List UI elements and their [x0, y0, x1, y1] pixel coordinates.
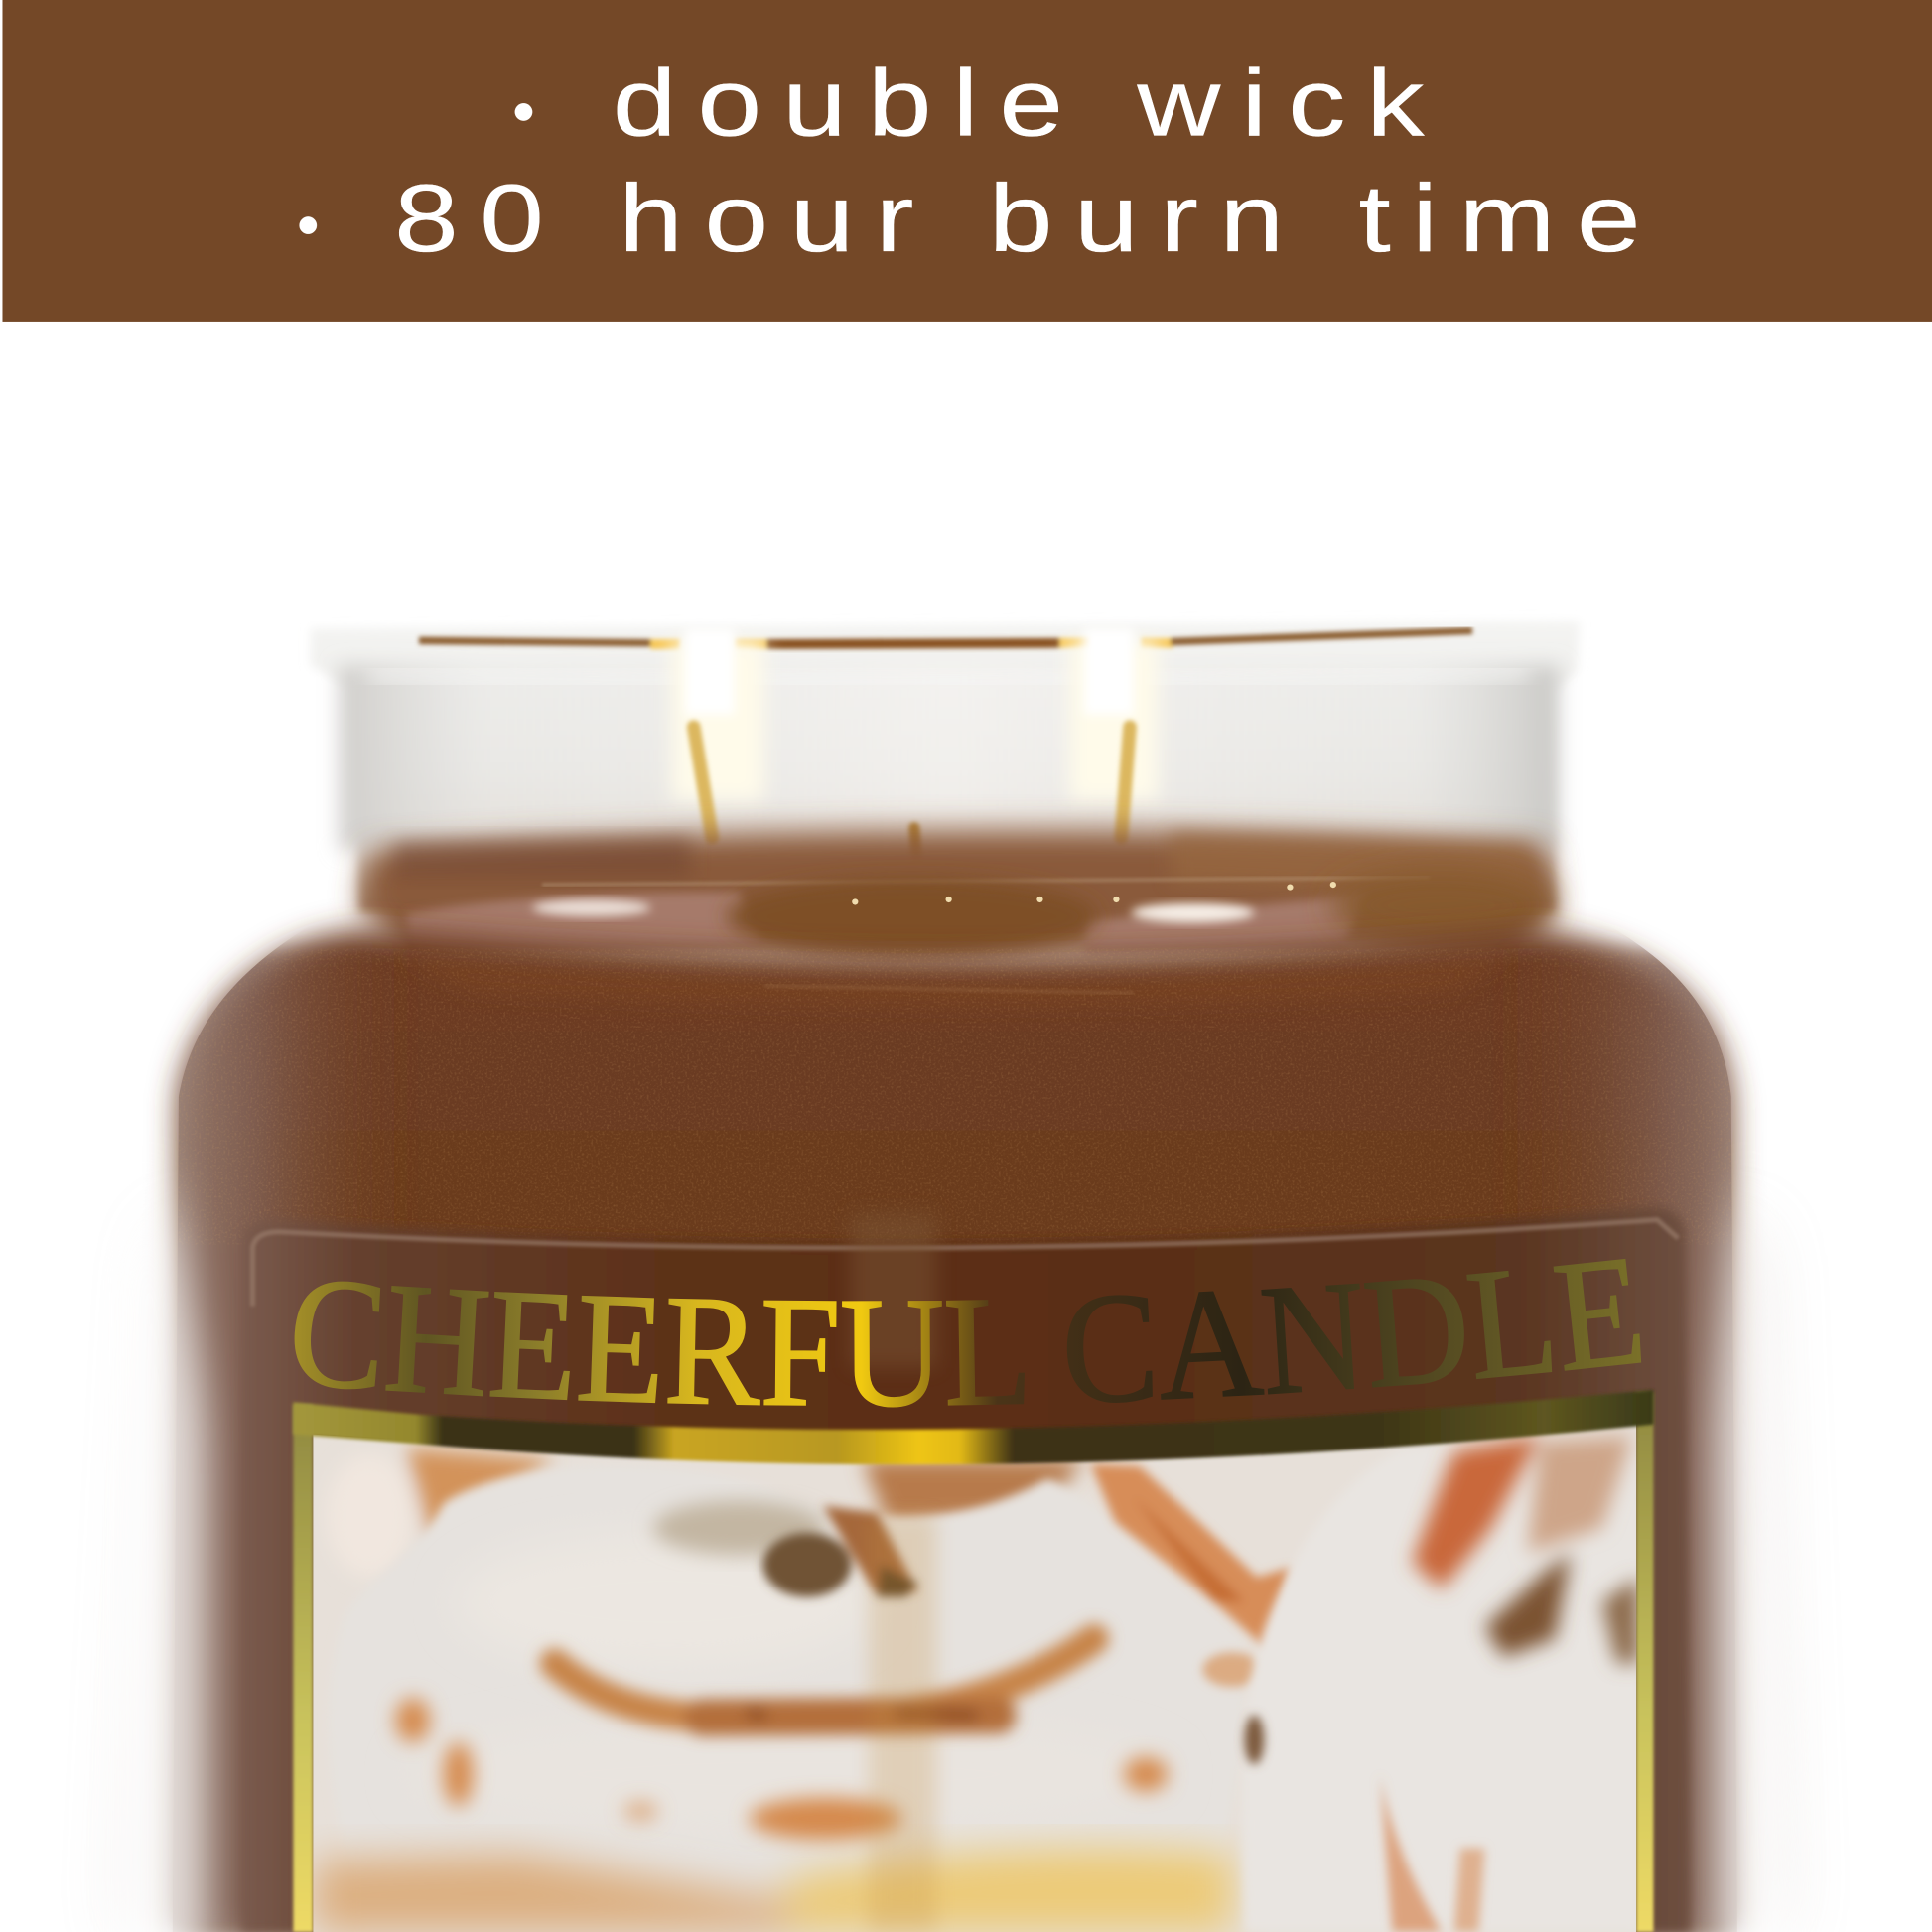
orange swirl band — [554, 1639, 1094, 1719]
wicks — [694, 727, 1130, 878]
candle jar photo — [148, 622, 1771, 1932]
flames — [671, 628, 1159, 801]
candle wax surface — [359, 830, 1555, 956]
lower golden pastry — [314, 1849, 1232, 1932]
right roll — [1242, 1436, 1639, 1932]
header banner — [2, 0, 1932, 322]
feature line: 80 hour burn time: 80 hour burn time — [394, 164, 1641, 272]
feature line: double wick: double wick — [613, 49, 1425, 156]
swirl centre — [653, 1501, 826, 1555]
glass jar neck — [311, 621, 1580, 911]
cinnamon roll picture — [313, 1417, 1639, 1932]
gold frame left — [293, 1405, 313, 1932]
soft jar halo — [129, 1232, 1780, 1932]
gold frame right — [1636, 1392, 1654, 1932]
orange pastry behind — [327, 1448, 1084, 1578]
right orange wedge — [1090, 1463, 1292, 1687]
label outline — [252, 1220, 1678, 1307]
brand name: CHEERFUL CANDLE — [294, 1259, 1642, 1408]
jar seam reflection — [869, 1516, 936, 1932]
main roll — [421, 1465, 1076, 1555]
glass rim line — [419, 630, 1472, 649]
gold band — [293, 1390, 1654, 1464]
front label — [240, 1205, 1696, 1932]
jar body — [111, 930, 1799, 1932]
lower edge fade — [111, 1207, 1799, 1932]
pastry flecks — [395, 1698, 1169, 1840]
